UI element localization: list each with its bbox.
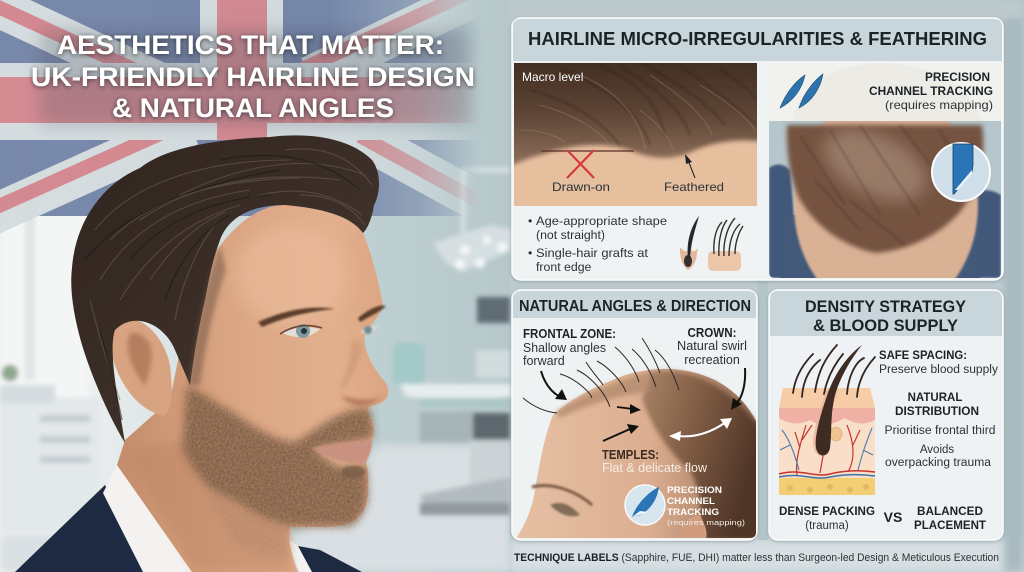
label: temples: TEMPLES: <box>602 448 659 462</box>
panel heading <box>805 298 966 335</box>
face and neck <box>117 205 388 572</box>
skin cross-section diagram <box>779 345 875 495</box>
arrow: crown <box>731 368 745 410</box>
bullet list: • <box>528 246 532 260</box>
panel heading: DENSITY STRATEGY <box>805 298 966 316</box>
label: temples: Flat & delicate flow <box>602 461 708 475</box>
label: precision channel tracking: (requires mapping) <box>885 98 993 112</box>
label: crown: recreation <box>684 353 740 367</box>
label: safe spacing: Preserve blood supply <box>879 364 998 376</box>
macro hairline photo <box>514 63 757 206</box>
label: crown: CROWN: <box>688 326 736 340</box>
label: frontal zone: Shallow angles <box>523 341 606 355</box>
label: natural distribution: Avoids <box>920 444 954 456</box>
cheek highlight <box>236 229 336 321</box>
label: balanced placement <box>914 506 986 532</box>
eyes and brows <box>282 327 320 337</box>
beard <box>183 386 373 560</box>
panel: density strategy and blood supply <box>769 290 1003 540</box>
bullet list: Age-appropriate shape <box>536 214 667 228</box>
nose shading <box>340 395 384 405</box>
icon: single-hair follicle <box>680 216 699 270</box>
label: precision channel tracking: CHANNEL <box>667 496 716 506</box>
label: safe spacing <box>879 350 998 376</box>
crown photo with channel tracking <box>769 63 1001 278</box>
icon: blade in circle <box>932 143 990 201</box>
jacket <box>15 485 362 572</box>
label: temples <box>602 448 708 475</box>
bullet list: (not straight) <box>536 228 605 242</box>
bullet list <box>528 214 667 274</box>
title: UK-FRIENDLY HAIRLINE DESIGN <box>31 62 475 92</box>
soul patch <box>341 466 365 478</box>
temple hair fade <box>188 245 226 385</box>
label: natural distribution: DISTRIBUTION <box>895 406 979 418</box>
sebaceous gland <box>830 427 842 441</box>
background: Union Jack flag <box>0 0 472 234</box>
blood vessels <box>779 425 875 478</box>
hair direction strands <box>523 338 679 413</box>
bullet list: Single-hair grafts at <box>536 246 649 260</box>
panel: natural angles and direction <box>512 290 760 540</box>
label: precision channel tracking: (requires mapping) <box>667 518 746 527</box>
dark haze behind the title <box>40 30 470 125</box>
label: frontal zone: FRONTAL ZONE: <box>523 327 616 341</box>
label: frontal zone <box>523 327 616 368</box>
label: drawn-on: Drawn-on <box>552 180 610 194</box>
label: dense packing <box>779 506 875 532</box>
bullet list: front edge <box>536 260 592 274</box>
ear <box>110 319 172 416</box>
panel header <box>513 19 1002 61</box>
lips <box>312 441 372 463</box>
title: & NATURAL ANGLES <box>112 93 394 123</box>
footer note: TECHNIQUE LABELS (Sapphire, FUE, DHI) matter less than Surgeon-led Design & Meticulous Execution <box>514 552 999 564</box>
label: precision channel tracking: CHANNEL TRACKING <box>869 84 993 98</box>
label: feathered: Feathered <box>664 180 724 194</box>
panel: hairline micro-irregularities and feathering <box>510 17 1005 283</box>
label: crown <box>677 326 747 367</box>
label: natural distribution: Prioritise frontal third <box>884 425 996 437</box>
label: precision channel tracking <box>667 485 746 527</box>
panel heading: & BLOOD SUPPLY <box>813 317 958 335</box>
label: safe spacing: SAFE SPACING: <box>879 350 967 362</box>
icon: sapphire blades <box>780 74 823 108</box>
label: macro level: Macro level <box>522 70 583 84</box>
label: balanced placement: PLACEMENT <box>914 520 986 532</box>
label: dense packing: DENSE PACKING <box>779 506 875 518</box>
arrow: upper temple <box>617 404 641 414</box>
cabinet in background <box>0 365 100 533</box>
arrow: swirl double-headed <box>669 418 732 441</box>
label: precision channel tracking: PRECISION <box>925 70 990 84</box>
arrow: frontal zone <box>541 371 567 400</box>
shirt collar <box>103 465 312 572</box>
hair <box>71 135 379 443</box>
label: precision channel tracking <box>869 70 993 112</box>
panel header <box>770 291 1002 336</box>
panel heading: HAIRLINE MICRO-IRREGULARITIES & FEATHERING <box>528 29 987 49</box>
portrait: man in profile <box>15 135 388 572</box>
icon: multi-hair graft <box>708 218 743 271</box>
label: vs: VS <box>884 509 902 525</box>
label: frontal zone: forward <box>523 354 565 368</box>
label: natural distribution: overpacking trauma <box>885 457 992 469</box>
title: AESTHETICS THAT MATTER: <box>57 30 444 60</box>
label: crown: Natural swirl <box>677 339 747 353</box>
neck shadow <box>158 446 296 572</box>
label: natural distribution: NATURAL <box>908 392 962 404</box>
surface hairs <box>793 345 875 397</box>
arrow to feathered hairline <box>685 154 695 178</box>
head in profile <box>515 369 760 540</box>
label: natural distribution <box>884 392 996 469</box>
label: precision channel tracking: TRACKING <box>667 507 719 517</box>
arrow: lower temple <box>603 424 639 441</box>
title <box>31 30 475 123</box>
label: dense packing: (trauma) <box>805 520 849 532</box>
panel header <box>513 291 756 318</box>
drawn-on straight hairline with red cross <box>541 150 634 178</box>
icon: precision blade <box>625 485 665 525</box>
surgical lamp and bed in background <box>393 170 512 515</box>
label: precision channel tracking: PRECISION <box>667 485 722 495</box>
label: balanced placement: BALANCED <box>917 506 983 518</box>
follicle and main hair <box>813 390 838 456</box>
bullet list: • <box>528 214 532 228</box>
panel heading: NATURAL ANGLES & DIRECTION <box>519 298 751 315</box>
